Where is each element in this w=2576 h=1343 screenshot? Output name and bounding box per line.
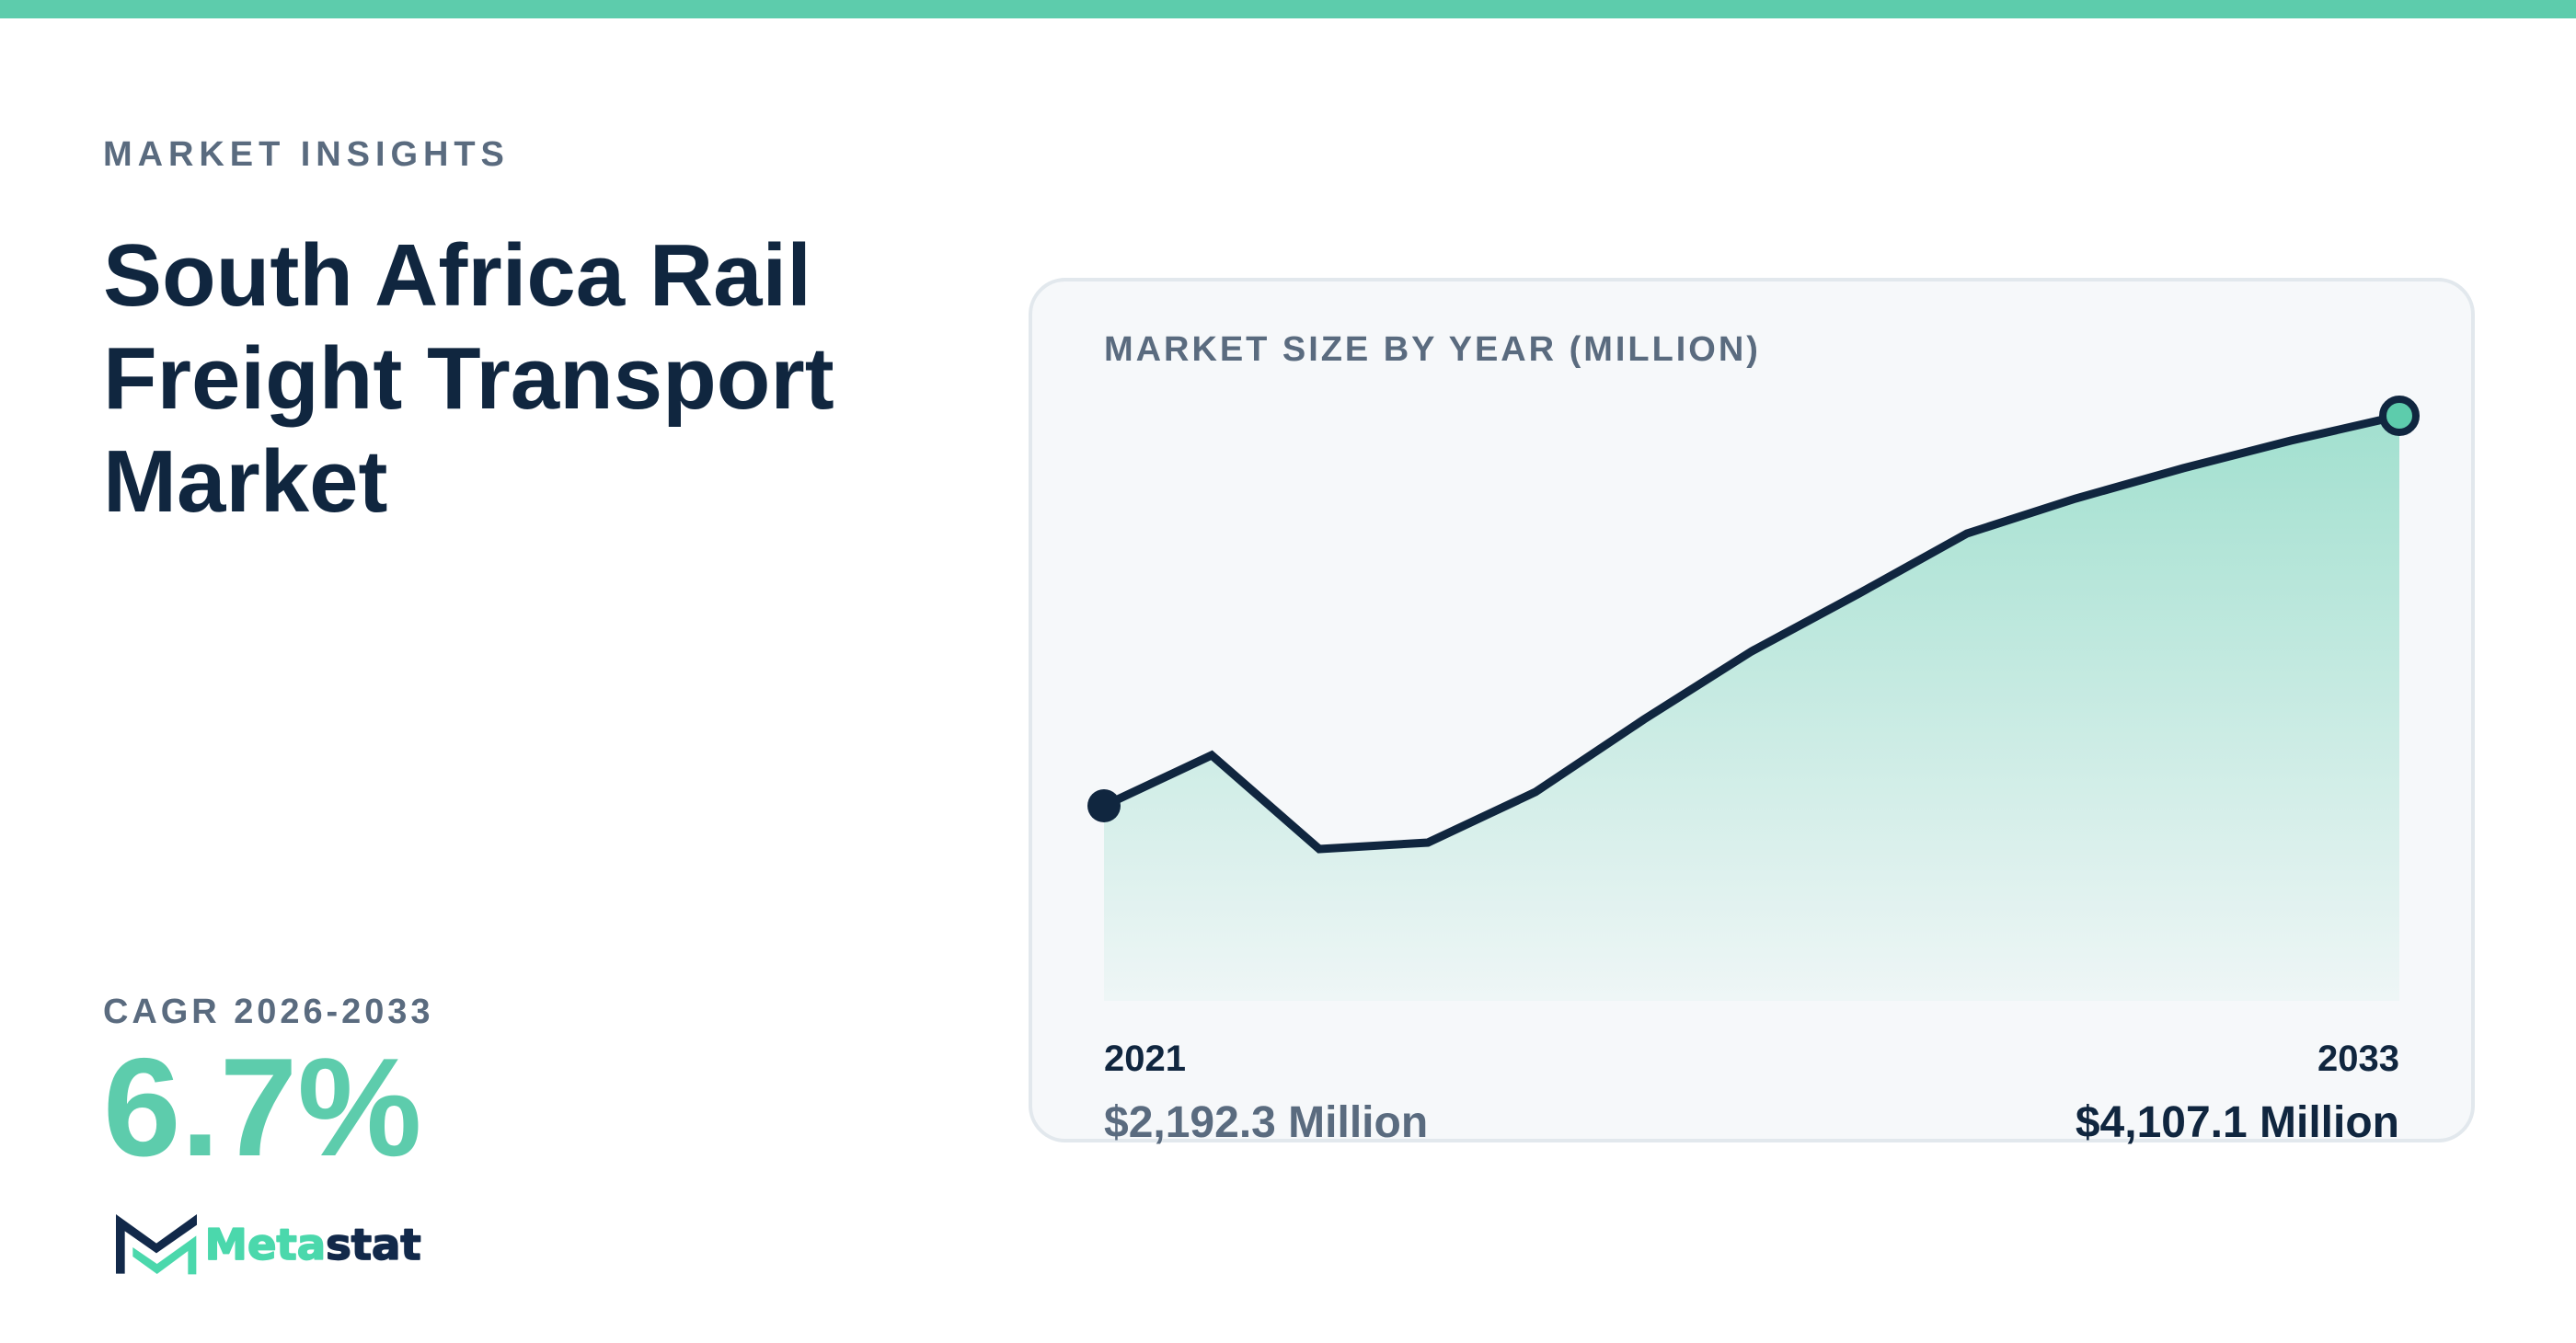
end value: $4,107.1 Million [2076,1098,2399,1147]
end year: 2033 [2317,1039,2399,1079]
start year: 2021 [1104,1039,1186,1079]
CAGR value: 6.7% [103,1029,421,1186]
start value: $2,192.3 Million [1104,1098,1428,1147]
title [103,226,834,531]
logo: Metastat: Metastat [205,1220,421,1269]
panel: market size chart [1029,278,2475,1142]
logo: Metastat [116,1214,421,1275]
title: Freight Transport [103,329,834,428]
eyebrow: market insights: MARKET INSIGHTS [103,135,510,174]
panel heading: MARKET SIZE BY YEAR (MILLION) [1104,330,1761,369]
area and line chart [1087,396,2420,997]
CAGR label: CAGR 2026-2033 [103,993,433,1031]
title: South Africa Rail [103,226,811,325]
top accent bar [0,0,2576,18]
title: Market [103,432,387,531]
